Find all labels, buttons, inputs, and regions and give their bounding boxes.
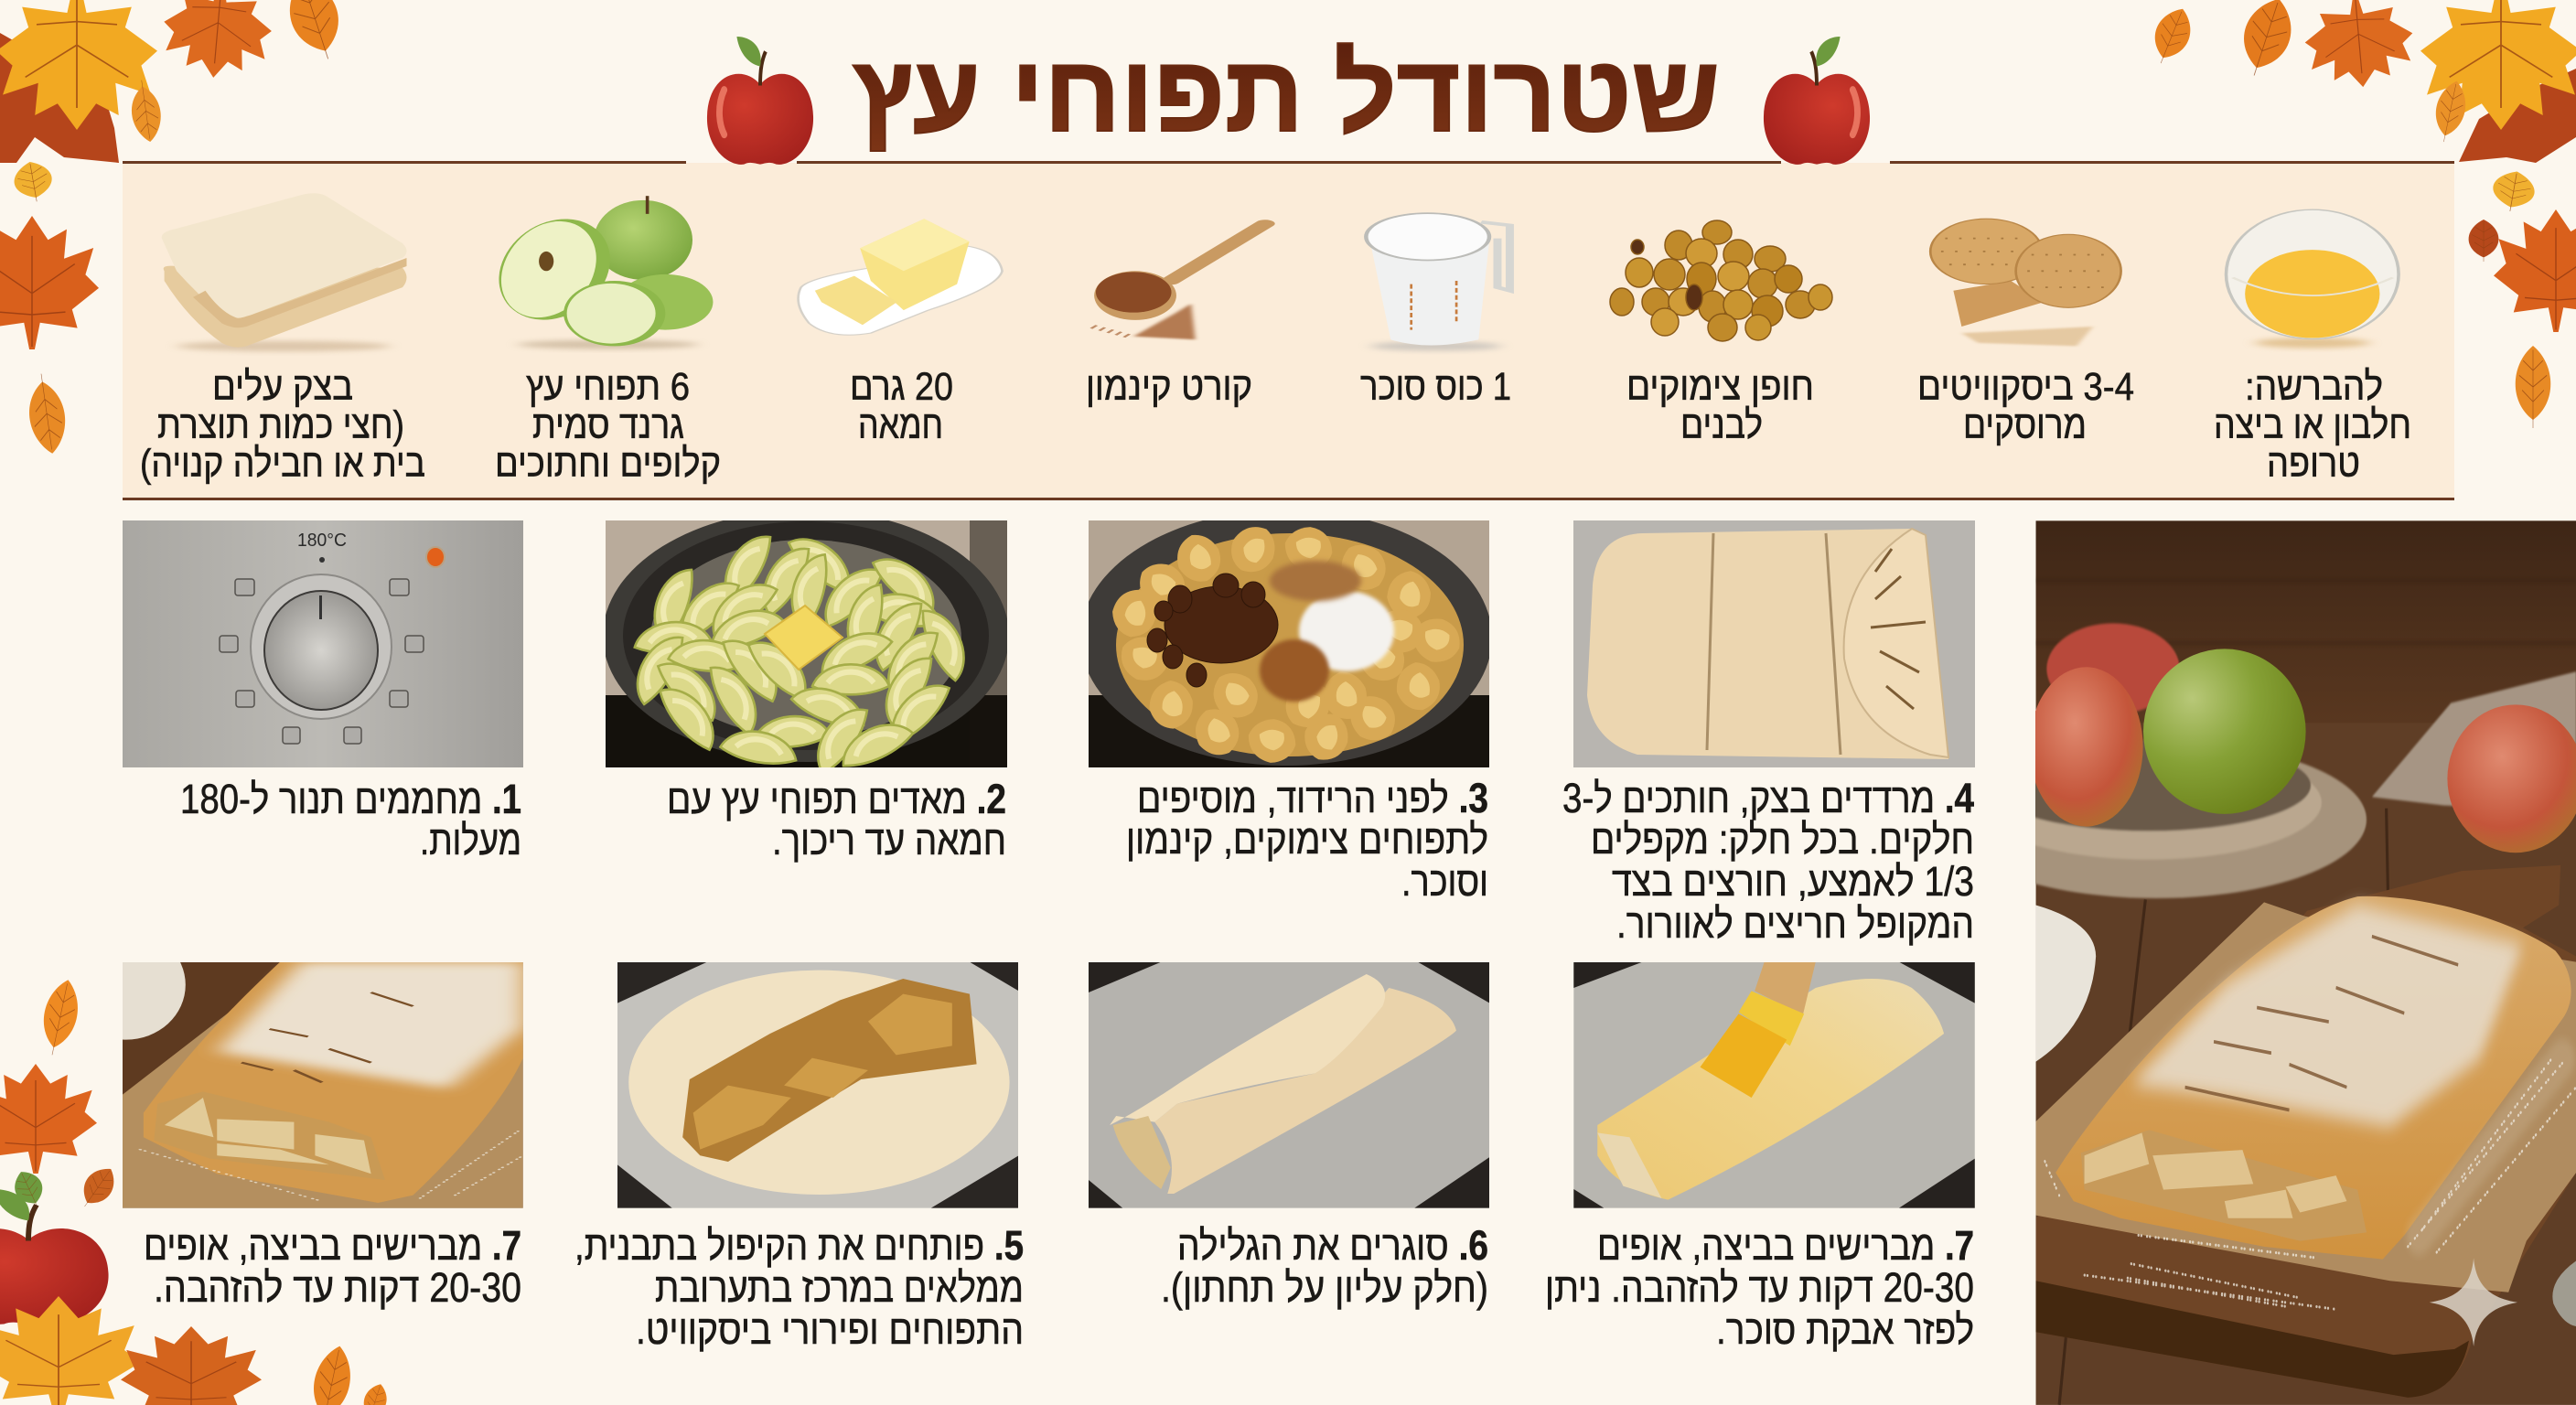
icon: crushed biscuits [1930, 219, 2121, 346]
photo: pastry brush [1701, 962, 1816, 1098]
label: brushing: להברשה: [2245, 365, 2383, 409]
step 1 text [180, 776, 521, 863]
step 7 right text [1545, 1222, 1974, 1353]
step photo 1: oven dial [123, 520, 523, 767]
step 1 text: מעלות. [420, 817, 521, 863]
label: raisins: חופן צימוקים [1626, 365, 1814, 409]
step 6 text: 6. סוגרים את הגלילה [1177, 1222, 1488, 1269]
step 4 text: 1/3 לאמצע, חורצים בצד [1612, 858, 1974, 905]
photo: green apple [2143, 649, 2306, 814]
ingredient labels [140, 365, 2411, 486]
icon: beaten egg in glass bowl [2227, 209, 2399, 349]
photo: left apple [2029, 667, 2143, 827]
label: cinnamon: קורט קינמון [1086, 365, 1252, 409]
step photo 5: filling on opened dough [617, 962, 1019, 1208]
label: apples: גרנד סמית [532, 403, 684, 447]
label: biscuits [1917, 365, 2134, 447]
step photo 7b: egg wash with brush [1573, 962, 1975, 1208]
panel: ingredients band [123, 161, 2454, 500]
step 6 text [1161, 1222, 1488, 1311]
step photo 2: apples sautéing in a pan [603, 509, 1009, 778]
step photo 3: filling with raisins, cinnamon and sugar [1080, 509, 1492, 768]
label: raisins: לבנים [1680, 403, 1763, 447]
step 7 left text: 7. מברישים בביצה, אופים [144, 1222, 521, 1269]
icon: title apple right [1764, 37, 1870, 165]
step 3 text [1126, 775, 1488, 905]
step 7 right text: 20-30 דקות עד להזהבה. ניתן [1545, 1264, 1974, 1311]
title: שטרודל תפוחי עץ [853, 34, 1720, 155]
label: biscuits: 3-4 ביסקוויטים [1917, 365, 2134, 409]
step 2 text [667, 776, 1006, 863]
label: apples: קלופים וחתוכים [495, 442, 721, 486]
decoration: top-right autumn leaves [2145, 0, 2576, 428]
label: brushing [2214, 365, 2411, 486]
step 4 text [1562, 775, 1974, 947]
photo: stacked plates [2035, 739, 2367, 900]
step 7 left text [144, 1222, 521, 1311]
label: butter: חמאה [858, 403, 943, 447]
label: puff pastry [140, 365, 425, 486]
label: puff pastry: בצק עלים [212, 365, 353, 409]
icon: butter on dish [799, 219, 1003, 335]
label: butter [850, 365, 953, 447]
label: butter: 20 גרם [850, 365, 953, 409]
step 3 text: 3. לפני הרידוד, מוסיפים [1137, 775, 1488, 821]
icon: golden raisins [1610, 220, 1832, 341]
photo: sugar dust [2045, 1059, 2576, 1309]
label: sugar: 1 כוס סוכר [1360, 365, 1511, 409]
label: brushing: טרופה [2267, 442, 2360, 486]
step 3 text: וסוכר. [1401, 858, 1488, 905]
icon: puff pastry [162, 193, 407, 351]
step photo 4: dough cut and folded [1573, 520, 1975, 767]
step 5 text: 5. פותחים את הקיפול בתבנית, [574, 1222, 1024, 1269]
step 7 left text: 20-30 דקות עד להזהבה. [154, 1264, 521, 1311]
oven temperature label: 180°C [297, 531, 347, 551]
icon: green apples [488, 196, 713, 349]
step 5 text [574, 1222, 1024, 1353]
step photo 7a: baked strudel close-up [123, 962, 523, 1208]
label: puff pastry: (חצי כמות תוצרת [157, 403, 404, 447]
step 4 text: המקופל חריצים לאוורור. [1616, 900, 1974, 947]
step 6 text: (חלק עליון על תחתון). [1161, 1264, 1488, 1311]
decoration: top-left autumn leaves [0, 0, 350, 456]
icon: cinnamon spoon [1092, 224, 1265, 339]
icon: title apple left [707, 37, 813, 165]
step 1 text: 1. מחממים תנור ל-180 [180, 776, 521, 822]
step 3 text: לתפוחים צימוקים, קינמון [1126, 816, 1488, 863]
step 7 right text: לפזר אבקת סוכר. [1716, 1306, 1974, 1353]
step 5 text: התפוחים ופירורי ביסקוויט. [636, 1306, 1024, 1353]
icon: measuring cup of sugar [1366, 213, 1509, 350]
step photo 6: closed roll [1089, 962, 1489, 1208]
step 4 text: 4. מרדדים בצק, חותכים ל-3 [1562, 775, 1974, 821]
right hero photo: finished strudel [2035, 520, 2576, 1405]
step 5 text: ממלאים במרכז בתערובת [655, 1264, 1024, 1311]
label: apples [495, 365, 721, 486]
decoration: bottom-left leaves and apple [0, 976, 392, 1405]
step 2 text: חמאה עד ריכוך. [772, 817, 1006, 863]
label: raisins [1626, 365, 1814, 447]
step 2 text: 2. מאדים תפוחי עץ עם [667, 776, 1006, 822]
label: puff pastry: בית או חבילה קנויה) [140, 442, 425, 486]
photo: parchment [2036, 902, 2576, 1292]
photo: cutting board [2036, 865, 2576, 1398]
photo: spoon [2552, 1260, 2576, 1326]
step 4 text: חלקים. בכל חלק: מקפלים [1591, 816, 1974, 863]
photo: right apple [2447, 704, 2576, 853]
icon: sparkle watermark [2430, 1258, 2517, 1346]
photo: strudel [2055, 896, 2571, 1260]
step 7 right text: 7. מברישים בביצה, אופים [1597, 1222, 1974, 1269]
label: brushing: חלבון או ביצה [2214, 403, 2411, 447]
label: apples: 6 תפוחי עץ [526, 365, 690, 409]
photo: sugar bowl [2036, 905, 2096, 1062]
photo: back red apple [2046, 623, 2180, 714]
label: biscuits: מרוסקים [1963, 403, 2087, 447]
photo: linen cloth [2372, 671, 2576, 811]
